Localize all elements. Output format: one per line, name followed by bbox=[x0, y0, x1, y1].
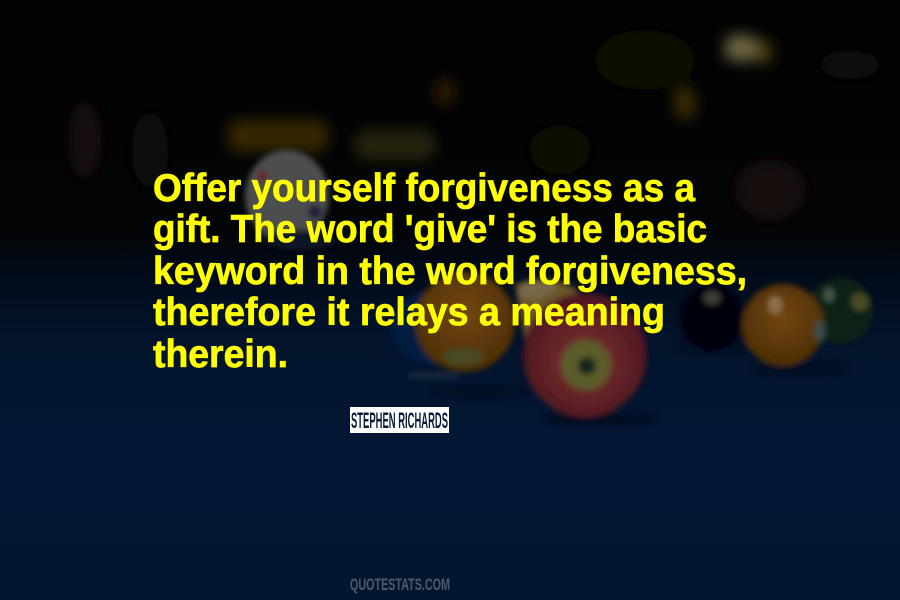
quote text: keyword in the word forgiveness, bbox=[153, 250, 747, 293]
quote text bbox=[153, 167, 747, 376]
quote text: therefore it relays a meaning bbox=[153, 291, 665, 334]
watermark: QUOTESTATS.COM bbox=[350, 575, 450, 594]
author label bbox=[350, 407, 449, 433]
blurred background lights bbox=[69, 30, 880, 220]
white cue ball bbox=[245, 150, 335, 250]
infographic: quote card: STEPHEN RICHARDS bbox=[351, 408, 448, 433]
quote text: Offer yourself forgiveness as a bbox=[153, 167, 695, 210]
quote text: therein. bbox=[153, 333, 288, 376]
quote text: gift. The word 'give' is the basic bbox=[153, 208, 707, 251]
billiard balls bbox=[392, 272, 873, 426]
